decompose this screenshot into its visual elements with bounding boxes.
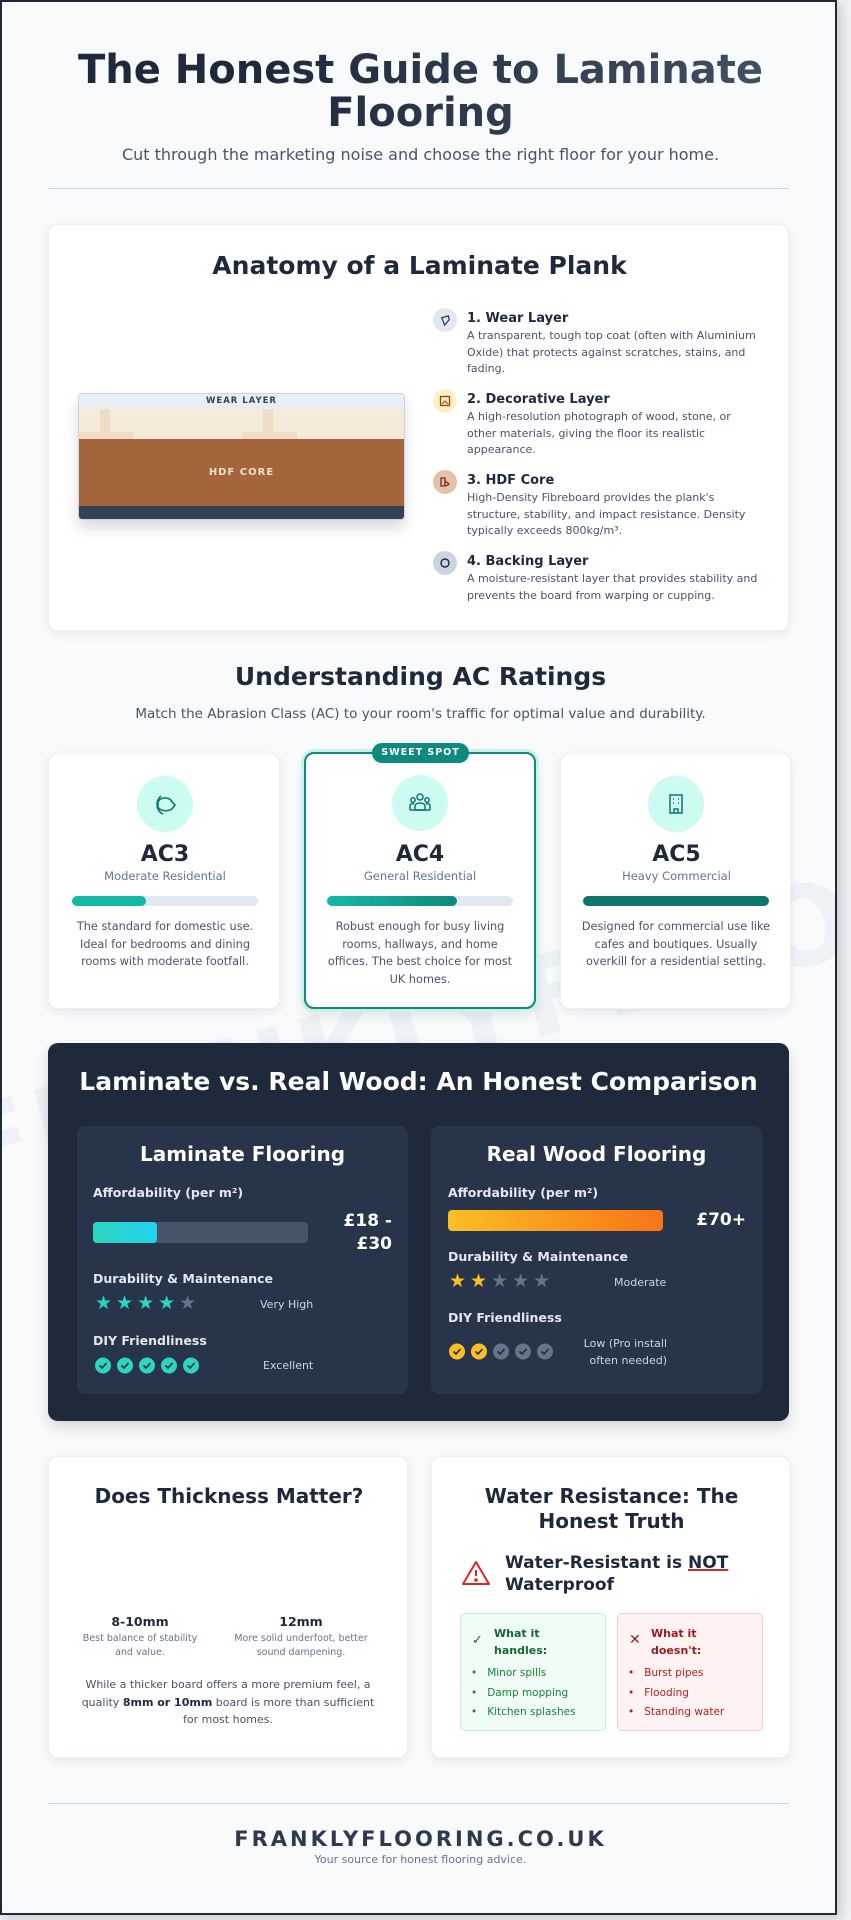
bar AC5 [583, 896, 769, 906]
box: handles: • Damp mopping [471, 1686, 568, 1698]
circles: wood DIY [449, 1344, 553, 1360]
panel: anatomy [48, 224, 789, 631]
box: handles: • Minor spills [471, 1667, 546, 1679]
item: decorative: 2. Decorative Layer [467, 392, 610, 407]
subpanel: laminate: Excellent [263, 1359, 313, 1372]
badge: sweet spot [372, 743, 469, 763]
title: The Honest Guide to Laminate [78, 47, 763, 93]
circles: laminate DIY [95, 1358, 199, 1374]
subpanel: real wood: DIY Friendliness [448, 1310, 562, 1325]
title [2, 49, 839, 135]
subpanel: real wood: Affordability (per m²) [448, 1185, 598, 1200]
card: AC4: Robust enough for busy living rooms, hallways, and home offices. The best choice for most UK homes. [328, 920, 512, 986]
option: 8-10mm: 8-10mm [111, 1614, 169, 1629]
AC subtitle: Match the Abrasion Class (AC) to your room's traffic for optimal value and durability. [135, 706, 706, 722]
subpanel: laminate: Affordability (per m²) [93, 1185, 243, 1200]
box: handles: • Kitchen splashes [471, 1706, 576, 1718]
card: AC5: Designed for commercial use like cafes and boutiques. Usually overkill for a residential setting. [582, 920, 770, 968]
subpanel: real wood: Low (Pro install often needed) [584, 1337, 667, 1366]
subpanel: laminate: Laminate Flooring [140, 1142, 345, 1166]
card: AC4: General Residential [364, 869, 476, 883]
thickness note: While a thicker board offers a more premium feel, a quality 8mm or 10mm board is more than sufficient for most homes. [82, 1678, 374, 1726]
stars: laminate: ★★★★★ [95, 1292, 200, 1314]
plank diagram: HDF CORE [209, 467, 274, 478]
card: AC5: AC5 [652, 842, 701, 867]
item: wear layer: A transparent, tough top coat (often with Aluminium Oxide) that protects against scratches, stains, and fading. [467, 329, 756, 375]
box: handles: What it [494, 1627, 540, 1640]
card: AC3: Moderate Residential [104, 869, 226, 883]
box: handles: ✓ [472, 1633, 483, 1648]
heading: AC ratings: Understanding AC Ratings [235, 662, 606, 691]
icon: people [392, 775, 448, 831]
item: core: High-Density Fibreboard provides the plank's structure, stability, and impact resistance. Density typically exceeds 800kg/m³. [467, 491, 745, 537]
item: wear layer: 1. Wear Layer [467, 311, 568, 326]
panel: thickness: Does Thickness Matter? [95, 1484, 363, 1508]
footer brand: FRANKLYFLOORING.CO.UK [234, 1827, 607, 1851]
bar AC3 [72, 896, 258, 906]
title: Flooring [327, 90, 514, 136]
plank diagram [78, 393, 405, 520]
heading: comparison: Laminate vs. Real Wood: An Honest Comparison [79, 1067, 758, 1096]
option: 12mm [234, 1614, 368, 1658]
footer tagline: Your source for honest flooring advice. [315, 1853, 526, 1866]
panel: water resistance [431, 1456, 790, 1758]
box: handles: handles: [494, 1644, 547, 1657]
subtitle: Cut through the marketing noise and choose the right floor for your home. [122, 145, 719, 164]
subpanel: laminate: £30 [356, 1234, 392, 1254]
item: core: 3. HDF Core [467, 473, 554, 488]
option: 12mm: More solid underfoot, better sound dampening. [234, 1633, 368, 1658]
item: wear layer [433, 308, 756, 375]
layer list [433, 308, 757, 602]
item: decorative: A high-resolution photograph of wood, stone, or other materials, giving the floor its realistic appearance. [467, 410, 731, 456]
icon: building [648, 776, 704, 832]
icon: warning [462, 1561, 490, 1585]
badge: sweet spot: SWEET SPOT [381, 747, 460, 758]
box: doesn't: • Burst pipes [628, 1667, 703, 1679]
box: doesn't: ✕ [629, 1632, 641, 1648]
option: 8-10mm [83, 1614, 197, 1658]
box: doesn't: doesn't: [651, 1644, 701, 1657]
subpanel: real wood: £70+ [696, 1210, 746, 1230]
card: AC4: AC4 [396, 842, 444, 867]
subpanel: laminate: £18 - [344, 1211, 392, 1231]
card: AC3: The standard for domestic use. Ideal for bedrooms and dining rooms with moderate footfall. [77, 920, 253, 968]
item: decorative [433, 389, 731, 456]
stars: wood: ★★★★★ [449, 1270, 554, 1292]
plank diagram: WEAR LAYER [206, 396, 277, 406]
subpanel: real wood: Moderate [614, 1276, 666, 1289]
subpanel: real wood: Durability & Maintenance [448, 1249, 628, 1264]
item: core [433, 470, 745, 537]
box: doesn't [617, 1613, 763, 1731]
subpanel: real wood: Real Wood Flooring [487, 1142, 706, 1166]
box: handles [460, 1613, 606, 1731]
box: doesn't: What it [651, 1627, 697, 1640]
subpanel: laminate: Very High [260, 1298, 313, 1311]
subpanel: laminate: Durability & Maintenance [93, 1271, 273, 1286]
warning text [505, 1553, 728, 1595]
bar: laminate price [93, 1222, 308, 1243]
panel: comparison [48, 1043, 789, 1421]
subpanel: laminate [77, 1126, 408, 1394]
item: backing: A moisture-resistant layer that provides stability and prevents the board from warping or cupping. [467, 572, 757, 602]
item: backing [433, 551, 757, 602]
warning text: Water-Resistant is NOT [505, 1553, 728, 1573]
bar: wood price [448, 1210, 663, 1231]
box: doesn't: • Standing water [628, 1706, 724, 1718]
panel: thickness [48, 1456, 408, 1758]
warning text: Waterproof [505, 1575, 614, 1595]
option: 8-10mm: Best balance of stability and value. [83, 1633, 197, 1658]
subpanel: real wood [431, 1126, 762, 1394]
icon: house [137, 776, 193, 832]
option: 12mm: 12mm [279, 1614, 323, 1629]
card: AC3: AC3 [141, 842, 189, 867]
box: doesn't: • Flooding [628, 1686, 689, 1698]
card: AC4 [304, 752, 536, 1009]
panel: water resistance: Water Resistance: The Honest Truth [485, 1484, 738, 1533]
bar AC4 [327, 896, 513, 906]
heading: anatomy: Anatomy of a Laminate Plank [212, 251, 627, 280]
card: AC5 [560, 753, 791, 1009]
subpanel: laminate: DIY Friendliness [93, 1333, 207, 1348]
card: AC3 [48, 753, 280, 1009]
card: AC5: Heavy Commercial [622, 869, 731, 883]
item: backing: 4. Backing Layer [467, 554, 588, 569]
